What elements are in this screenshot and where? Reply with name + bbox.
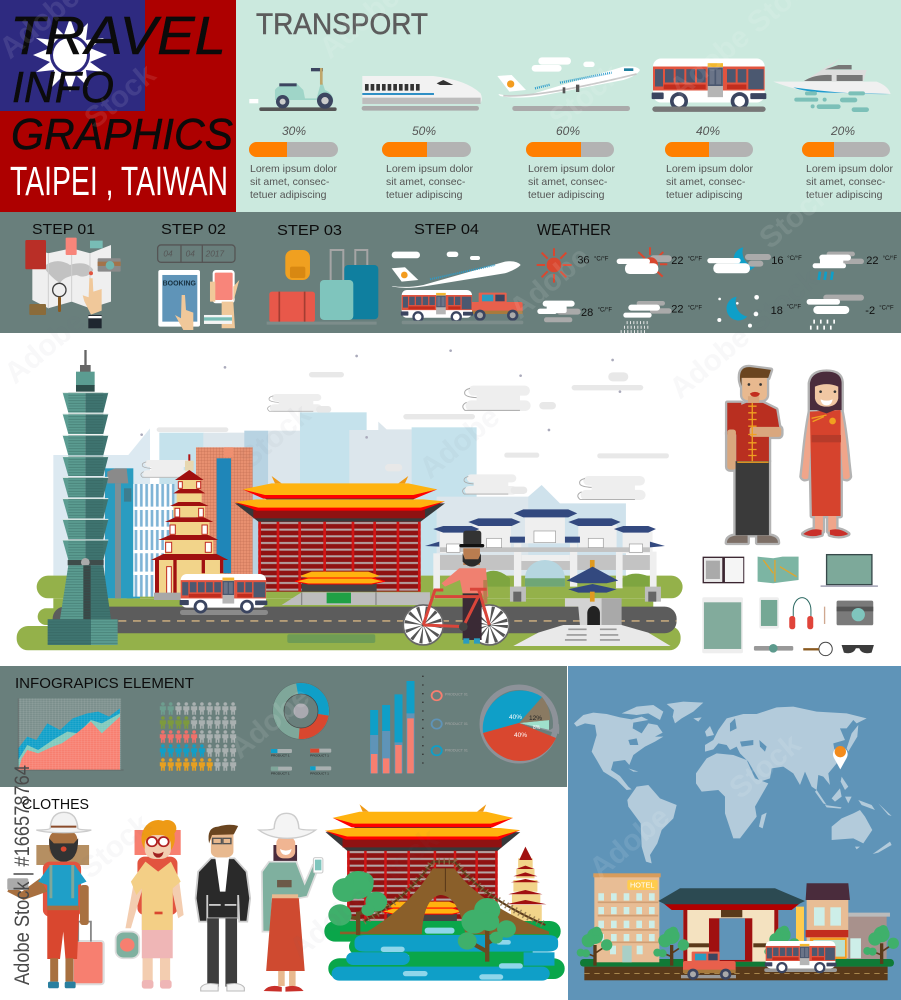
step 4: transport: STEP 04	[414, 221, 479, 238]
street base	[580, 959, 894, 980]
faint stock watermarks: Stock	[78, 57, 162, 135]
stat: 20%	[802, 124, 893, 201]
step 4: transport	[392, 221, 523, 324]
icon: jeep	[681, 952, 736, 980]
faint stock watermarks: Stock	[753, 177, 837, 255]
step 2: booking: BOOKING	[163, 279, 196, 288]
icon: yacht	[773, 58, 891, 112]
step 2: booking: 04	[163, 249, 173, 259]
heading: transport: TRANSPORT	[256, 8, 428, 41]
stat: 20%: sit amet, consec-	[806, 176, 886, 188]
man in black suit	[196, 825, 250, 991]
stat: 60%	[526, 124, 615, 201]
stat: 30%	[249, 124, 338, 201]
river	[332, 928, 558, 981]
stat: 50%: 50%	[412, 124, 436, 138]
world map	[574, 702, 892, 863]
icon: cloud 28: °C/°F	[598, 307, 612, 313]
icon: rain cloud 22: °C/°F	[883, 256, 897, 262]
faint stock watermarks: Stock	[723, 727, 807, 805]
stat: 50%: sit amet, consec-	[386, 176, 466, 188]
pie chart: 40%	[514, 732, 527, 739]
stat: 40%: Lorem ipsum dolor	[666, 163, 753, 175]
stat: 20%: tetuer adipiscing	[806, 189, 883, 201]
panel: infographics element	[0, 666, 567, 787]
step 2: booking	[158, 221, 239, 330]
chart legend rings	[432, 691, 468, 755]
icon: drizzle 22: 22	[671, 304, 684, 316]
stat: 50%: Lorem ipsum dolor	[386, 163, 473, 175]
step 2: booking: 04	[186, 249, 195, 259]
icon: woman in red qipao	[802, 372, 850, 536]
icon: temple garden with bridge	[324, 804, 565, 981]
faint stock watermarks: Stock	[543, 57, 627, 135]
faint stock watermarks: Adobe Stock	[663, 262, 825, 405]
ground and road	[17, 576, 683, 650]
pagoda	[506, 847, 546, 923]
step 1: plan	[25, 221, 121, 328]
arched bridge	[340, 862, 549, 934]
faint stock watermarks: Adobe	[583, 800, 676, 885]
icon: scooter	[249, 68, 337, 111]
icon: moon and cloud 16	[707, 247, 802, 273]
green island	[324, 921, 565, 979]
icon: rain cloud 22: 22	[866, 255, 879, 267]
faint stock watermarks: Stock	[233, 397, 317, 475]
bar chart	[374, 676, 423, 773]
stat: 40%	[665, 124, 753, 201]
icon: snow cloud -2: °C/°F	[879, 305, 894, 311]
icon: bus on road	[180, 574, 268, 615]
step 2: booking: STEP 02	[161, 221, 226, 238]
stat: 30%: tetuer adipiscing	[250, 189, 327, 201]
icons: trees	[577, 925, 899, 966]
icon: memorial gate	[425, 509, 665, 602]
title	[10, 6, 233, 204]
title: INFO	[12, 63, 114, 112]
icon: white sun emblem	[33, 18, 107, 92]
faint stock watermarks: Adobe Stock	[283, 822, 445, 965]
icon: red gate temple	[658, 888, 805, 962]
panel: city landscape	[0, 333, 901, 666]
step 2: booking: 2017	[205, 249, 225, 259]
stat: 40%: sit amet, consec-	[666, 176, 746, 188]
icon: hotel	[593, 873, 661, 962]
faint stock watermarks: Stock	[73, 807, 157, 885]
map pin: Taiwan	[833, 746, 848, 769]
icon: sun behind cloud 22: °C/°F	[688, 256, 702, 262]
donut legend	[271, 749, 331, 775]
stat: 60%: tetuer adipiscing	[528, 189, 605, 201]
chart legend rings: PRODUCT 01	[445, 722, 468, 726]
city skyline background	[53, 412, 626, 584]
stat: 20%: 20%	[830, 124, 855, 138]
icon: bicycle and man with hat	[403, 531, 509, 645]
icon: clear night 18	[717, 295, 801, 328]
icon: taipei 101 tower	[48, 350, 118, 645]
panel: steps and weather	[0, 212, 901, 333]
heading: weather: WEATHER	[537, 222, 611, 239]
faint stock watermarks: Adobe	[223, 680, 316, 765]
icon: clear night 18: 18	[771, 305, 783, 317]
step 3: luggage: STEP 03	[277, 222, 342, 239]
pie chart	[480, 684, 559, 764]
weather forecast grid	[537, 247, 897, 332]
icon: airplane	[497, 57, 640, 111]
icon: cloud 28: 28	[581, 307, 593, 319]
faint stock watermarks: Adobe	[503, 240, 596, 325]
area chart	[18, 698, 124, 770]
panel: clothes	[0, 787, 567, 1000]
donut legend: PRODUCT 1	[310, 753, 329, 757]
stat: 30%: Lorem ipsum dolor	[250, 163, 337, 175]
woman with sun hat and phone	[259, 813, 323, 992]
icon: drizzle 22: °C/°F	[688, 305, 702, 311]
icon: sun 36	[537, 248, 609, 283]
title: GRAPHICS	[11, 110, 233, 159]
step 3: luggage	[267, 222, 378, 325]
stat: 50%	[382, 124, 473, 201]
icon: sun 36: 36	[577, 254, 590, 266]
heading: clothes: CLOTHES	[22, 796, 89, 813]
pie chart: 8%	[533, 725, 541, 731]
icon: bus	[764, 941, 837, 973]
icon: sun behind cloud 22: 22	[671, 255, 684, 267]
stat: 60%: Lorem ipsum dolor	[528, 163, 615, 175]
faint stock watermarks: Adobe	[413, 400, 506, 485]
panel: world map and city	[568, 666, 901, 1000]
icon: sun 36: °C/°F	[594, 256, 609, 262]
icon: snow cloud -2	[807, 295, 894, 328]
icon: cloud 28	[537, 301, 612, 322]
icon: high speed train	[362, 76, 482, 111]
donut chart	[272, 682, 330, 740]
icon: hotel: HOTEL	[630, 881, 654, 890]
icon: memorial hall	[513, 560, 671, 646]
panel: transport	[236, 0, 901, 212]
icon: moon and cloud 16: 16	[771, 255, 784, 267]
panel: flag header	[0, 0, 236, 212]
icon: red bus	[652, 58, 766, 112]
icon: red pagoda	[151, 454, 228, 600]
donut legend: PRODUCT 1	[271, 753, 290, 757]
icon: man in red tangzhuang	[727, 367, 781, 543]
pie chart: 40%	[509, 714, 522, 721]
stat: 30%: 30%	[282, 124, 306, 138]
title: TRAVEL	[10, 6, 226, 66]
heading: infographics element: INFOGRAPICS ELEMENT	[15, 675, 194, 692]
icon: clear night 18: °C/°F	[787, 305, 801, 311]
stat: 30%: sit amet, consec-	[250, 176, 330, 188]
icon: rain cloud 22	[813, 252, 897, 280]
stat: 40%: tetuer adipiscing	[666, 189, 743, 201]
stat: 60%: sit amet, consec-	[528, 176, 608, 188]
stat: 20%: Lorem ipsum dolor	[806, 163, 893, 175]
pie chart: 12%	[529, 715, 542, 722]
chart legend rings: PRODUCT 01	[445, 749, 468, 753]
decorative clouds and birds	[140, 349, 669, 500]
buildings: glass towers	[105, 447, 253, 598]
icon: drizzle 22	[621, 301, 702, 332]
stat: 60%: 60%	[556, 124, 580, 138]
title: TAIPEI , TAIWAN	[10, 158, 228, 204]
chart legend rings: PRODUCT 01	[445, 693, 468, 697]
donut legend: PRODUCT 1	[271, 771, 290, 775]
icon: moon and cloud 16: °C/°F	[787, 256, 802, 262]
icon: grand hotel temple	[234, 476, 445, 605]
icon: travel gadgets	[702, 554, 878, 656]
step 1: plan: STEP 01	[32, 221, 95, 238]
vertical stock id text: Adobe Stock | #166578764	[11, 765, 34, 985]
woman traveller with glasses	[116, 820, 184, 989]
donut legend: PRODUCT 1	[310, 771, 329, 775]
trees	[328, 871, 516, 962]
icon: snow cloud -2: -2	[865, 305, 875, 317]
icon: sun behind cloud 22	[617, 247, 702, 277]
stat: 40%: 40%	[696, 124, 720, 138]
traveller with beard and suitcase	[7, 812, 104, 988]
icon: shops	[796, 883, 890, 959]
pictogram chart	[159, 702, 237, 771]
stat: 50%: tetuer adipiscing	[386, 189, 463, 201]
faint stock watermarks: Adobe	[0, 305, 91, 390]
